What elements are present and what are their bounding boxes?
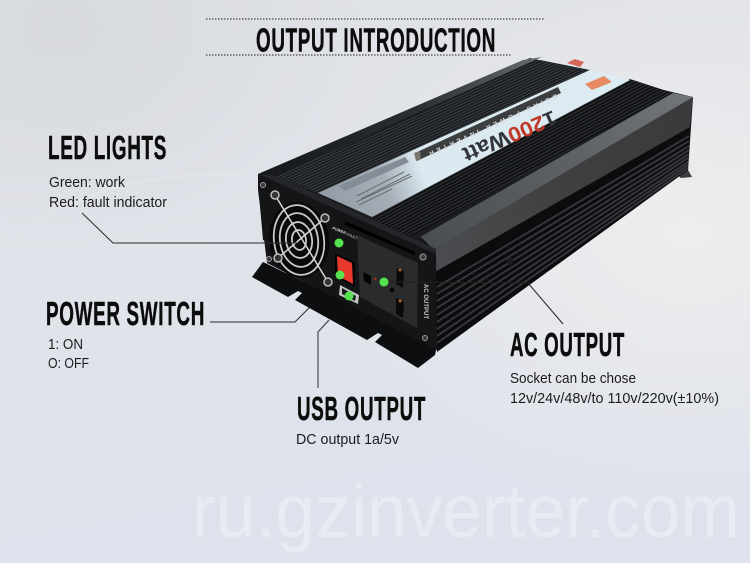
usb output text [296, 390, 426, 448]
power label: POWER [332, 226, 347, 235]
led lights text [48, 129, 167, 211]
side face with fins [420, 93, 693, 343]
power switch text: O: OFF [48, 356, 89, 372]
power switch [335, 253, 355, 287]
top label with rating: 1200Watt [459, 105, 560, 166]
top label with rating: DC/AC POWER INVERTER [428, 92, 558, 157]
corner screws [260, 182, 428, 340]
usb port [339, 285, 359, 304]
panel slot [345, 221, 415, 255]
led lights text: Red: fault indicator [49, 195, 167, 211]
power switch text: 1: ON [48, 337, 83, 353]
fan grille [264, 191, 334, 286]
title: OUTPUT INTRODUCTION [256, 22, 496, 58]
watermark: ru.gzinverter.com [192, 469, 740, 553]
side face base [433, 98, 693, 352]
led lights text: Green: work [49, 175, 126, 191]
callout line: power switch [210, 307, 310, 322]
fault label: FAULT [346, 232, 359, 241]
ac output text: 12v/24v/48v/to 110v/220v(±10%) [510, 391, 719, 407]
power switch text [46, 295, 205, 372]
green indicator dots [334, 238, 388, 300]
led lights text: LED LIGHTS [48, 129, 167, 166]
usb output text: DC output 1a/5v [296, 432, 400, 448]
front panel [258, 174, 437, 350]
usb output text: USB OUTPUT [297, 390, 426, 427]
callout line: usb output [318, 320, 329, 388]
top label with rating [318, 59, 630, 217]
mounting feet [252, 170, 692, 368]
top face [258, 57, 693, 250]
ac output text: Socket can be chose [510, 371, 636, 387]
ac output side label: AC OUTPUT [422, 284, 428, 319]
socket panel [357, 235, 418, 328]
callout line: ac output [384, 282, 563, 324]
power switch text: POWER SWITCH [46, 295, 205, 332]
ac output text: AC OUTPUT [510, 326, 625, 363]
callout line: led lights [82, 213, 300, 243]
inverter device [252, 57, 693, 368]
ac output text [510, 326, 719, 407]
